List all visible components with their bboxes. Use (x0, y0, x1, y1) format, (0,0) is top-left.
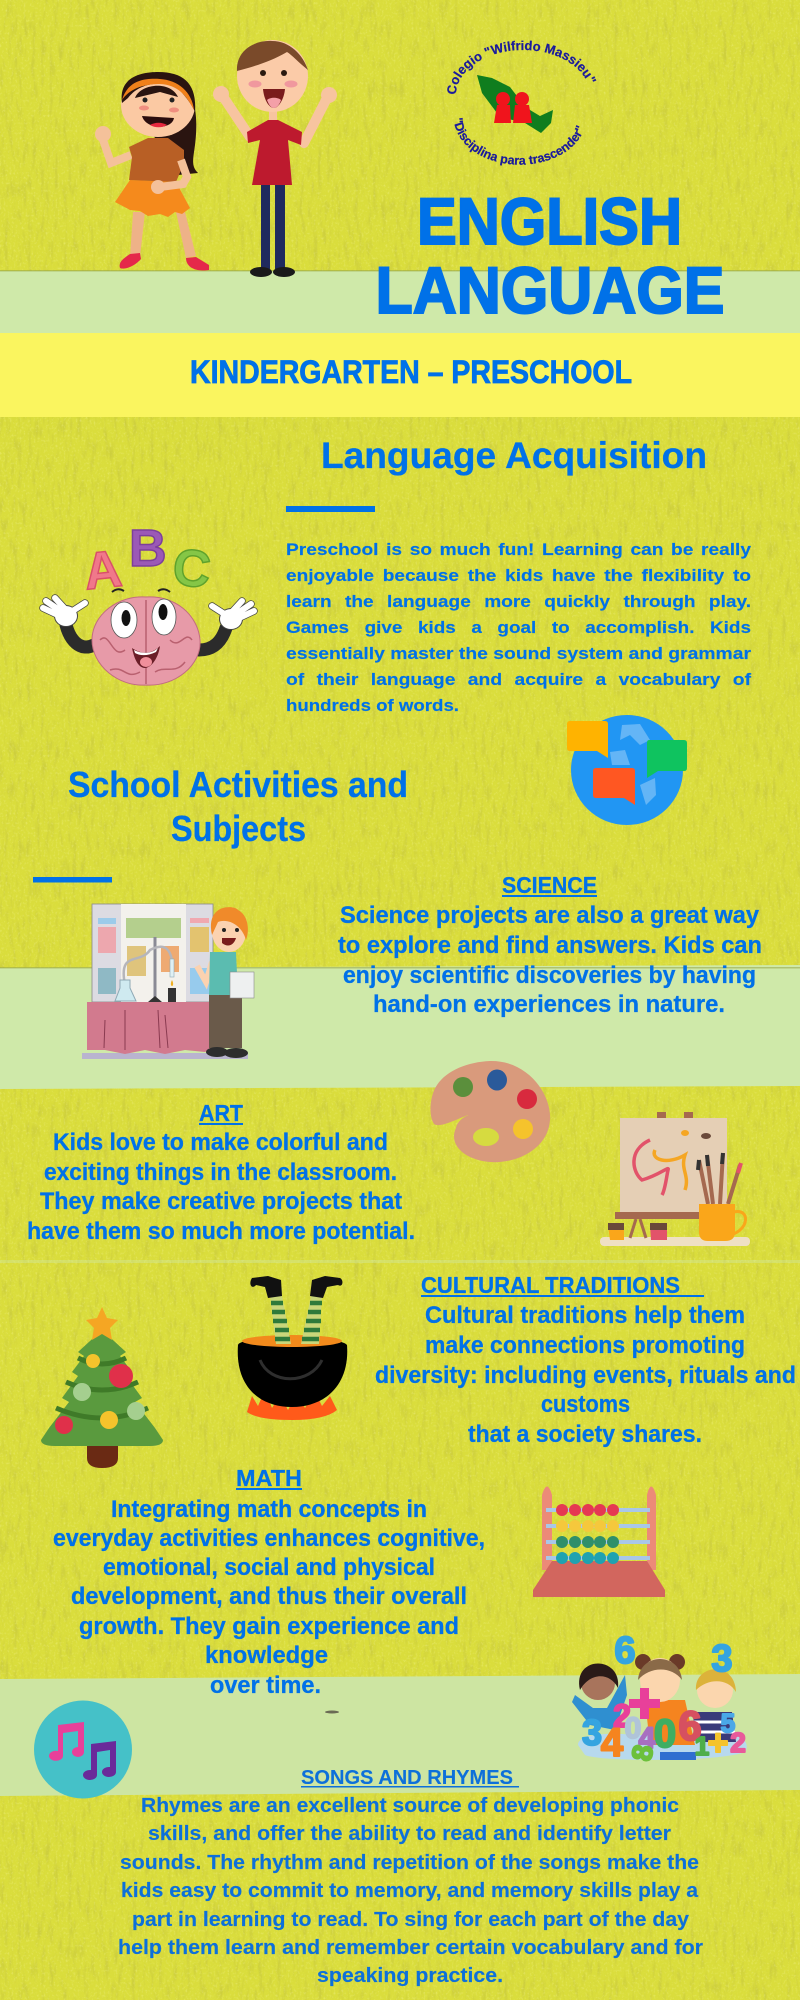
text block: songs and rhymes: help them learn and remember certain vocabulary and for (118, 1937, 703, 1959)
banner: kindergarten preschool: KINDERGARTEN – PRESCHOOL (190, 354, 632, 390)
text block: preschool paragraph: hundreds of words. (286, 697, 459, 715)
text block: science: to explore and find answers. Kids can (338, 932, 762, 959)
text block: science: enjoy scientific discoveries by having (343, 962, 756, 989)
illustration: kids with numbers: 6 (614, 1630, 636, 1672)
text block: math: development, and thus their overall (71, 1583, 467, 1610)
illustration: kids with numbers: 2 (613, 1698, 631, 1734)
text block: songs and rhymes: SONGS AND RHYMES (301, 1767, 513, 1789)
logo: school emblem (447, 40, 596, 166)
text block: cultural traditions: Cultural traditions help them (425, 1302, 745, 1329)
text block: preschool paragraph: Games give kids a goal to accomplish. Kids (286, 619, 751, 637)
text block: songs and rhymes: part in learning to read. To sing for each part of the day (132, 1909, 690, 1931)
illustration: science fair boy (82, 904, 254, 1059)
text block: cultural traditions: CULTURAL TRADITIONS (421, 1272, 680, 1298)
text block: cultural traditions: customs (541, 1391, 630, 1418)
text block: art: Kids love to make colorful and (53, 1129, 388, 1156)
text block: science: Science projects are also a great way (340, 902, 760, 929)
illustration: kids with numbers: + (707, 1722, 729, 1763)
icon: globe with speech bubbles (567, 715, 687, 825)
text block: cultural traditions: make connections promoting (425, 1332, 745, 1359)
text block: songs and rhymes (118, 1767, 703, 1987)
text block: science: SCIENCE (502, 872, 597, 898)
illustration: kids with numbers: 3 (711, 1638, 733, 1680)
icon: brain with ABC: A (81, 540, 125, 601)
heading: school activities and subjects: Subjects (171, 808, 306, 849)
text block: preschool paragraph: enjoyable because the kids have the flexibility to (286, 567, 751, 585)
logo: school emblem: "Disciplina para trascender" (454, 118, 582, 166)
icon: witch cauldron (238, 1276, 347, 1420)
text block: songs and rhymes: speaking practice. (317, 1965, 503, 1987)
text block: math: MATH (236, 1465, 302, 1491)
icon: christmas tree (41, 1307, 163, 1468)
illustration: kids with numbers: 1 (695, 1731, 709, 1761)
logo: school emblem: Colegio "Wilfrido Massieu" (447, 40, 596, 94)
text block: art: They make creative projects that (40, 1188, 402, 1215)
icon: easel and brushes (600, 1112, 750, 1246)
illustration: kids with numbers (572, 1630, 747, 1765)
text block: art: have them so much more potential. (27, 1218, 415, 1245)
text block: preschool paragraph (286, 541, 752, 715)
text block: songs and rhymes: kids easy to commit to memory, and memory skills play a (121, 1880, 699, 1902)
illustration: kids with numbers: 6 (678, 1702, 702, 1749)
text block: math: everyday activities enhances cognitive, (53, 1525, 485, 1552)
text block: math: Integrating math concepts in (111, 1496, 427, 1523)
heading: language acquisition: Language Acquisition (321, 435, 707, 476)
illustration: kids with numbers: 0 (625, 1712, 641, 1745)
text block: math: knowledge (205, 1642, 328, 1669)
illustration: kids with numbers: 0 (654, 1712, 676, 1756)
illustration: boy (213, 40, 337, 277)
title (376, 184, 724, 327)
title: LANGUAGE (376, 253, 724, 327)
icon: brain with ABC (43, 520, 254, 685)
illustration: kids with numbers: 5 (721, 1708, 735, 1738)
text block: science: hand-on experiences in nature. (373, 991, 725, 1018)
text block: math (53, 1465, 485, 1699)
title: ENGLISH (417, 184, 682, 258)
heading: school activities and subjects: School Activities and (68, 764, 408, 805)
illustration: kids with numbers: 3 (582, 1712, 602, 1753)
text block: science (338, 872, 762, 1018)
icon: paint palette (430, 1061, 550, 1162)
icon: abacus (533, 1486, 665, 1597)
text block: songs and rhymes: sounds. The rhythm and repetition of the songs make the (120, 1852, 699, 1874)
text block: preschool paragraph: of their language and acquire a vocabulary of (286, 671, 752, 689)
text block: cultural traditions (375, 1272, 796, 1448)
icon: music notes (34, 1700, 132, 1798)
banner: kindergarten preschool (0, 333, 800, 417)
text block: songs and rhymes: Rhymes are an excellent source of developing phonic (141, 1795, 679, 1817)
text block: math: over time. (210, 1672, 321, 1699)
text block: math: emotional, social and physical (103, 1554, 435, 1581)
text block: preschool paragraph: Preschool is so much fun! Learning can be really (286, 541, 752, 559)
text block: math: growth. They gain experience and (79, 1613, 459, 1640)
text block: cultural traditions: diversity: including events, rituals and (375, 1362, 796, 1389)
text block: songs and rhymes: skills, and offer the ability to read and identify letter (148, 1823, 671, 1845)
text block: cultural traditions: that a society shares. (468, 1421, 702, 1448)
illustration: kids with numbers: 2 (730, 1727, 746, 1758)
text block: art: ART (199, 1100, 243, 1126)
heading: language acquisition (286, 435, 707, 512)
illustration: kids with numbers: 4 (639, 1722, 656, 1755)
text block: art: exciting things in the classroom. (44, 1159, 397, 1186)
illustration: girl (95, 72, 209, 270)
background green bands (0, 270, 800, 1796)
text block: preschool paragraph: learn the language more quickly through play. (286, 593, 751, 611)
icon: brain with ABC: B (129, 520, 167, 578)
illustration: kids with numbers: 4 (601, 1721, 624, 1765)
text block: art (27, 1100, 415, 1245)
icon: brain with ABC: C (170, 538, 213, 600)
heading: school activities and subjects (33, 764, 408, 882)
illustration: kids with numbers: 8 (626, 1743, 659, 1763)
text block: preschool paragraph: essentially master the sound system and grammar (286, 645, 752, 663)
